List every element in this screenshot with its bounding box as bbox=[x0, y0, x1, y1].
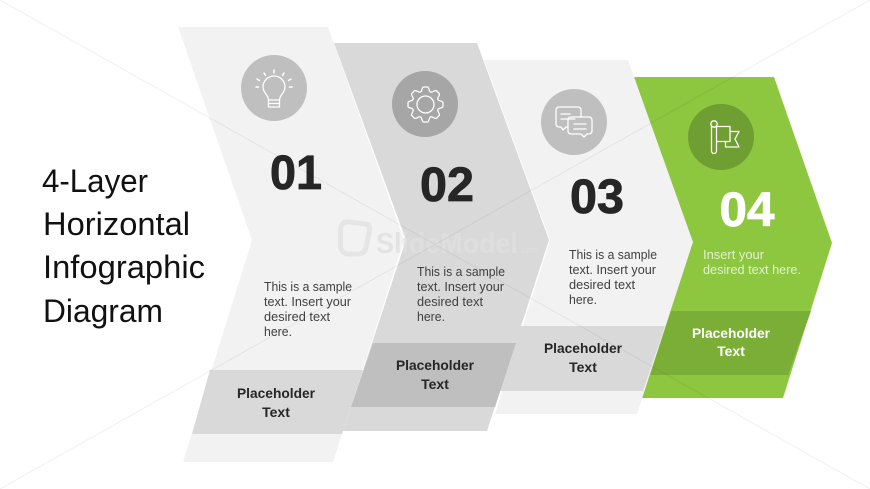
text block 01: text. Insert your bbox=[264, 295, 351, 309]
band 01 bbox=[192, 370, 363, 434]
text block 04: desired text here. bbox=[703, 263, 801, 277]
text block 02 bbox=[417, 265, 505, 324]
chevron 02 bbox=[334, 43, 549, 431]
text block 03 bbox=[569, 248, 657, 307]
band 03: Text bbox=[569, 359, 597, 375]
text block 01: here. bbox=[264, 325, 292, 339]
icon: gear bbox=[392, 71, 458, 137]
text block 04 bbox=[703, 248, 801, 277]
band 02: Placeholder bbox=[396, 357, 475, 373]
band 04: Placeholder bbox=[692, 325, 771, 341]
text block 03: desired text bbox=[569, 278, 636, 292]
panel: layer 02 bbox=[334, 43, 549, 431]
band 01: Text bbox=[262, 404, 290, 420]
text block 02: This is a sample bbox=[417, 265, 505, 279]
text block 02: text. Insert your bbox=[417, 280, 504, 294]
number 02: 02 bbox=[420, 159, 474, 212]
chevron 01 bbox=[178, 27, 404, 462]
text block 01: desired text bbox=[264, 310, 331, 324]
watermark: SlideModel bbox=[376, 228, 518, 260]
number 01: 01 bbox=[270, 147, 322, 200]
title: Diagram bbox=[43, 293, 163, 329]
band 02: Text bbox=[421, 376, 449, 392]
text block 02: desired text bbox=[417, 295, 484, 309]
text block 03: This is a sample bbox=[569, 248, 657, 262]
watermark: .com bbox=[519, 245, 538, 255]
band 03 bbox=[497, 326, 665, 391]
title bbox=[42, 163, 205, 329]
title: 4-Layer bbox=[42, 163, 148, 199]
icon: speech bubbles bbox=[541, 89, 607, 155]
text block 03: text. Insert your bbox=[569, 263, 656, 277]
text block 02: here. bbox=[417, 310, 445, 324]
title: Infographic bbox=[43, 249, 205, 285]
number 04: 04 bbox=[720, 184, 775, 237]
band 03: Placeholder bbox=[544, 340, 623, 356]
icon: flag bbox=[688, 104, 754, 170]
title: Horizontal bbox=[43, 206, 190, 242]
chevron 03 bbox=[484, 60, 693, 414]
text block 01: This is a sample bbox=[264, 280, 352, 294]
icon: light bulb bbox=[241, 55, 307, 121]
text block 01 bbox=[264, 280, 352, 339]
watermark bbox=[340, 222, 538, 260]
text block 04: Insert your bbox=[703, 248, 764, 262]
band 04: Text bbox=[717, 343, 745, 359]
text block 03: here. bbox=[569, 293, 597, 307]
chevron 04 bbox=[634, 77, 832, 398]
band 01: Placeholder bbox=[237, 385, 316, 401]
band 02 bbox=[351, 343, 516, 407]
band 04 bbox=[650, 311, 811, 375]
panel: layer 01 bbox=[178, 27, 404, 462]
panel: layer 04 bbox=[634, 77, 832, 398]
number 03: 03 bbox=[570, 171, 624, 224]
panel: layer 03 bbox=[484, 60, 693, 414]
